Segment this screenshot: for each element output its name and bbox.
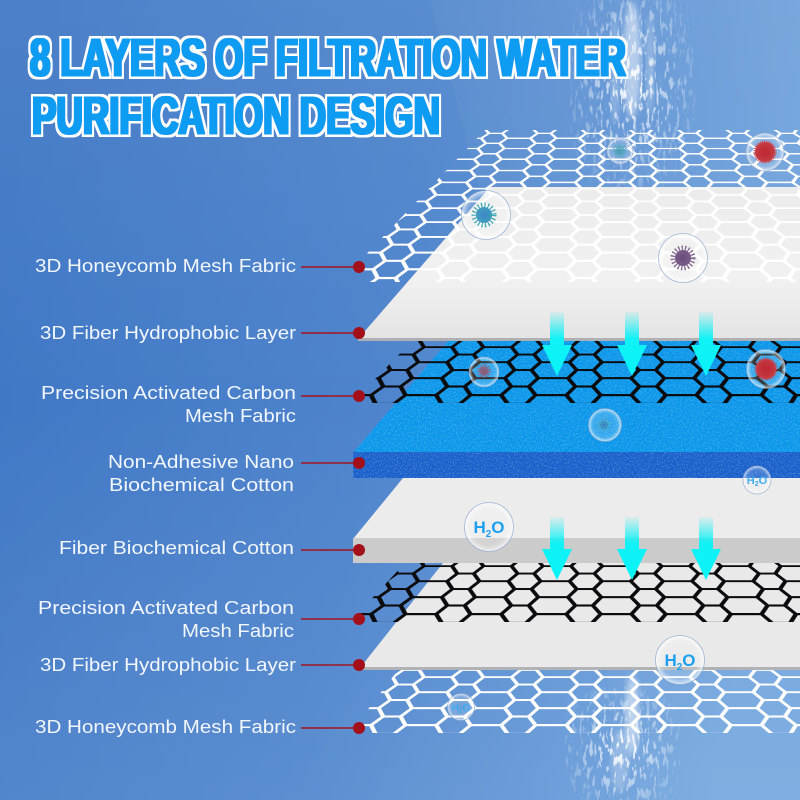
bubble: red virus bbox=[746, 350, 786, 388]
label: Non-Adhesive Nano Biochemical Cotton: Non-Adhesive Nano bbox=[108, 452, 294, 472]
bubble: red virus top right bbox=[746, 133, 784, 171]
arrows upper bbox=[542, 312, 721, 376]
label: 3D Honeycomb Mesh Fabric top bbox=[35, 256, 365, 276]
bubble: H2O lower right: O bbox=[682, 651, 696, 670]
arrow 4 bbox=[542, 517, 572, 580]
label: 3D Fiber Hydrophobic Layer top bbox=[40, 323, 365, 343]
label: Precision Activated Carbon Mesh Fabric top: Precision Activated Carbon bbox=[41, 383, 296, 403]
title line 2: PURIFICATION DESIGN bbox=[32, 86, 440, 146]
label: 3D Honeycomb Mesh Fabric top: 3D Honeycomb Mesh Fabric bbox=[35, 256, 296, 276]
label: Non-Adhesive Nano Biochemical Cotton bbox=[108, 452, 365, 495]
label: Fiber Biochemical Cotton bbox=[59, 538, 365, 558]
label: Precision Activated Carbon Mesh Fabric top bbox=[41, 383, 365, 426]
bubble: H2O small right: H bbox=[747, 475, 755, 487]
arrow 3 bbox=[691, 312, 721, 376]
bubble: H2O lower right: 2 bbox=[677, 662, 683, 673]
layer 6: black activated carbon mesh lower bbox=[358, 563, 800, 622]
bubble: H2O bottom small bbox=[448, 694, 474, 720]
label: Precision Activated Carbon Mesh Fabric bottom: Mesh Fabric bbox=[182, 621, 294, 641]
bubble: H2O small right bbox=[743, 466, 771, 494]
bubble: H2O bottom small: H bbox=[452, 703, 459, 714]
bubble: H2O lower right bbox=[656, 636, 704, 684]
title bbox=[30, 28, 626, 146]
label: 3D Fiber Hydrophobic Layer top: 3D Fiber Hydrophobic Layer bbox=[40, 323, 296, 343]
arrow 1 bbox=[542, 312, 572, 376]
layer 5: fiber biochemical cotton bbox=[353, 478, 800, 563]
bubble: H2O small right: O bbox=[759, 475, 768, 487]
bubble: H2O small right: 2 bbox=[755, 481, 759, 488]
layer 7: white hydrophobic sheet lower bbox=[360, 563, 800, 670]
label: 3D Honeycomb Mesh Fabric bottom: 3D Honeycomb Mesh Fabric bbox=[35, 717, 296, 737]
label: Non-Adhesive Nano Biochemical Cotton: Biochemical Cotton bbox=[109, 475, 294, 495]
label: Precision Activated Carbon Mesh Fabric bottom: Precision Activated Carbon bbox=[38, 598, 294, 618]
arrow 2 bbox=[617, 312, 647, 376]
label: Precision Activated Carbon Mesh Fabric bottom bbox=[38, 598, 365, 641]
bubble: H2O left bbox=[464, 502, 514, 552]
bubble: teal virus bbox=[462, 190, 510, 240]
bubble: purple virus small bbox=[469, 357, 499, 387]
label: Precision Activated Carbon Mesh Fabric top: Mesh Fabric bbox=[185, 406, 296, 426]
layer 2: white hydrophobic sheet bbox=[358, 187, 800, 341]
arrows lower bbox=[542, 517, 721, 580]
layer 3: black activated carbon mesh bbox=[364, 341, 800, 403]
bubble: H2O lower right: H bbox=[664, 651, 677, 670]
arrow 5 bbox=[617, 517, 647, 580]
label: 3D Honeycomb Mesh Fabric bottom bbox=[35, 717, 365, 737]
bubble: purple virus bbox=[658, 234, 708, 282]
layer 1: white honeycomb mesh bbox=[364, 130, 800, 282]
bubble: H2O left: O bbox=[491, 518, 505, 537]
bubble: teal virus small top bbox=[607, 138, 633, 164]
label: 3D Fiber Hydrophobic Layer bottom bbox=[40, 655, 365, 675]
bubble: H2O left: H bbox=[473, 518, 486, 537]
label: 3D Fiber Hydrophobic Layer bottom: 3D Fiber Hydrophobic Layer bbox=[40, 655, 296, 675]
arrow 6 bbox=[691, 517, 721, 580]
bubble: H2O left: 2 bbox=[486, 529, 492, 540]
water stream bottom bbox=[565, 675, 680, 800]
bubble: H2O bottom small: O bbox=[462, 703, 470, 714]
layer 8: white honeycomb mesh bottom bbox=[364, 670, 800, 733]
layer 4: blue nano biochemical cotton bbox=[353, 340, 800, 478]
label: Fiber Biochemical Cotton: Fiber Biochemical Cotton bbox=[59, 538, 294, 558]
bubble: H2O bottom small: 2 bbox=[459, 709, 463, 715]
bubble: blue virus bbox=[588, 408, 622, 442]
